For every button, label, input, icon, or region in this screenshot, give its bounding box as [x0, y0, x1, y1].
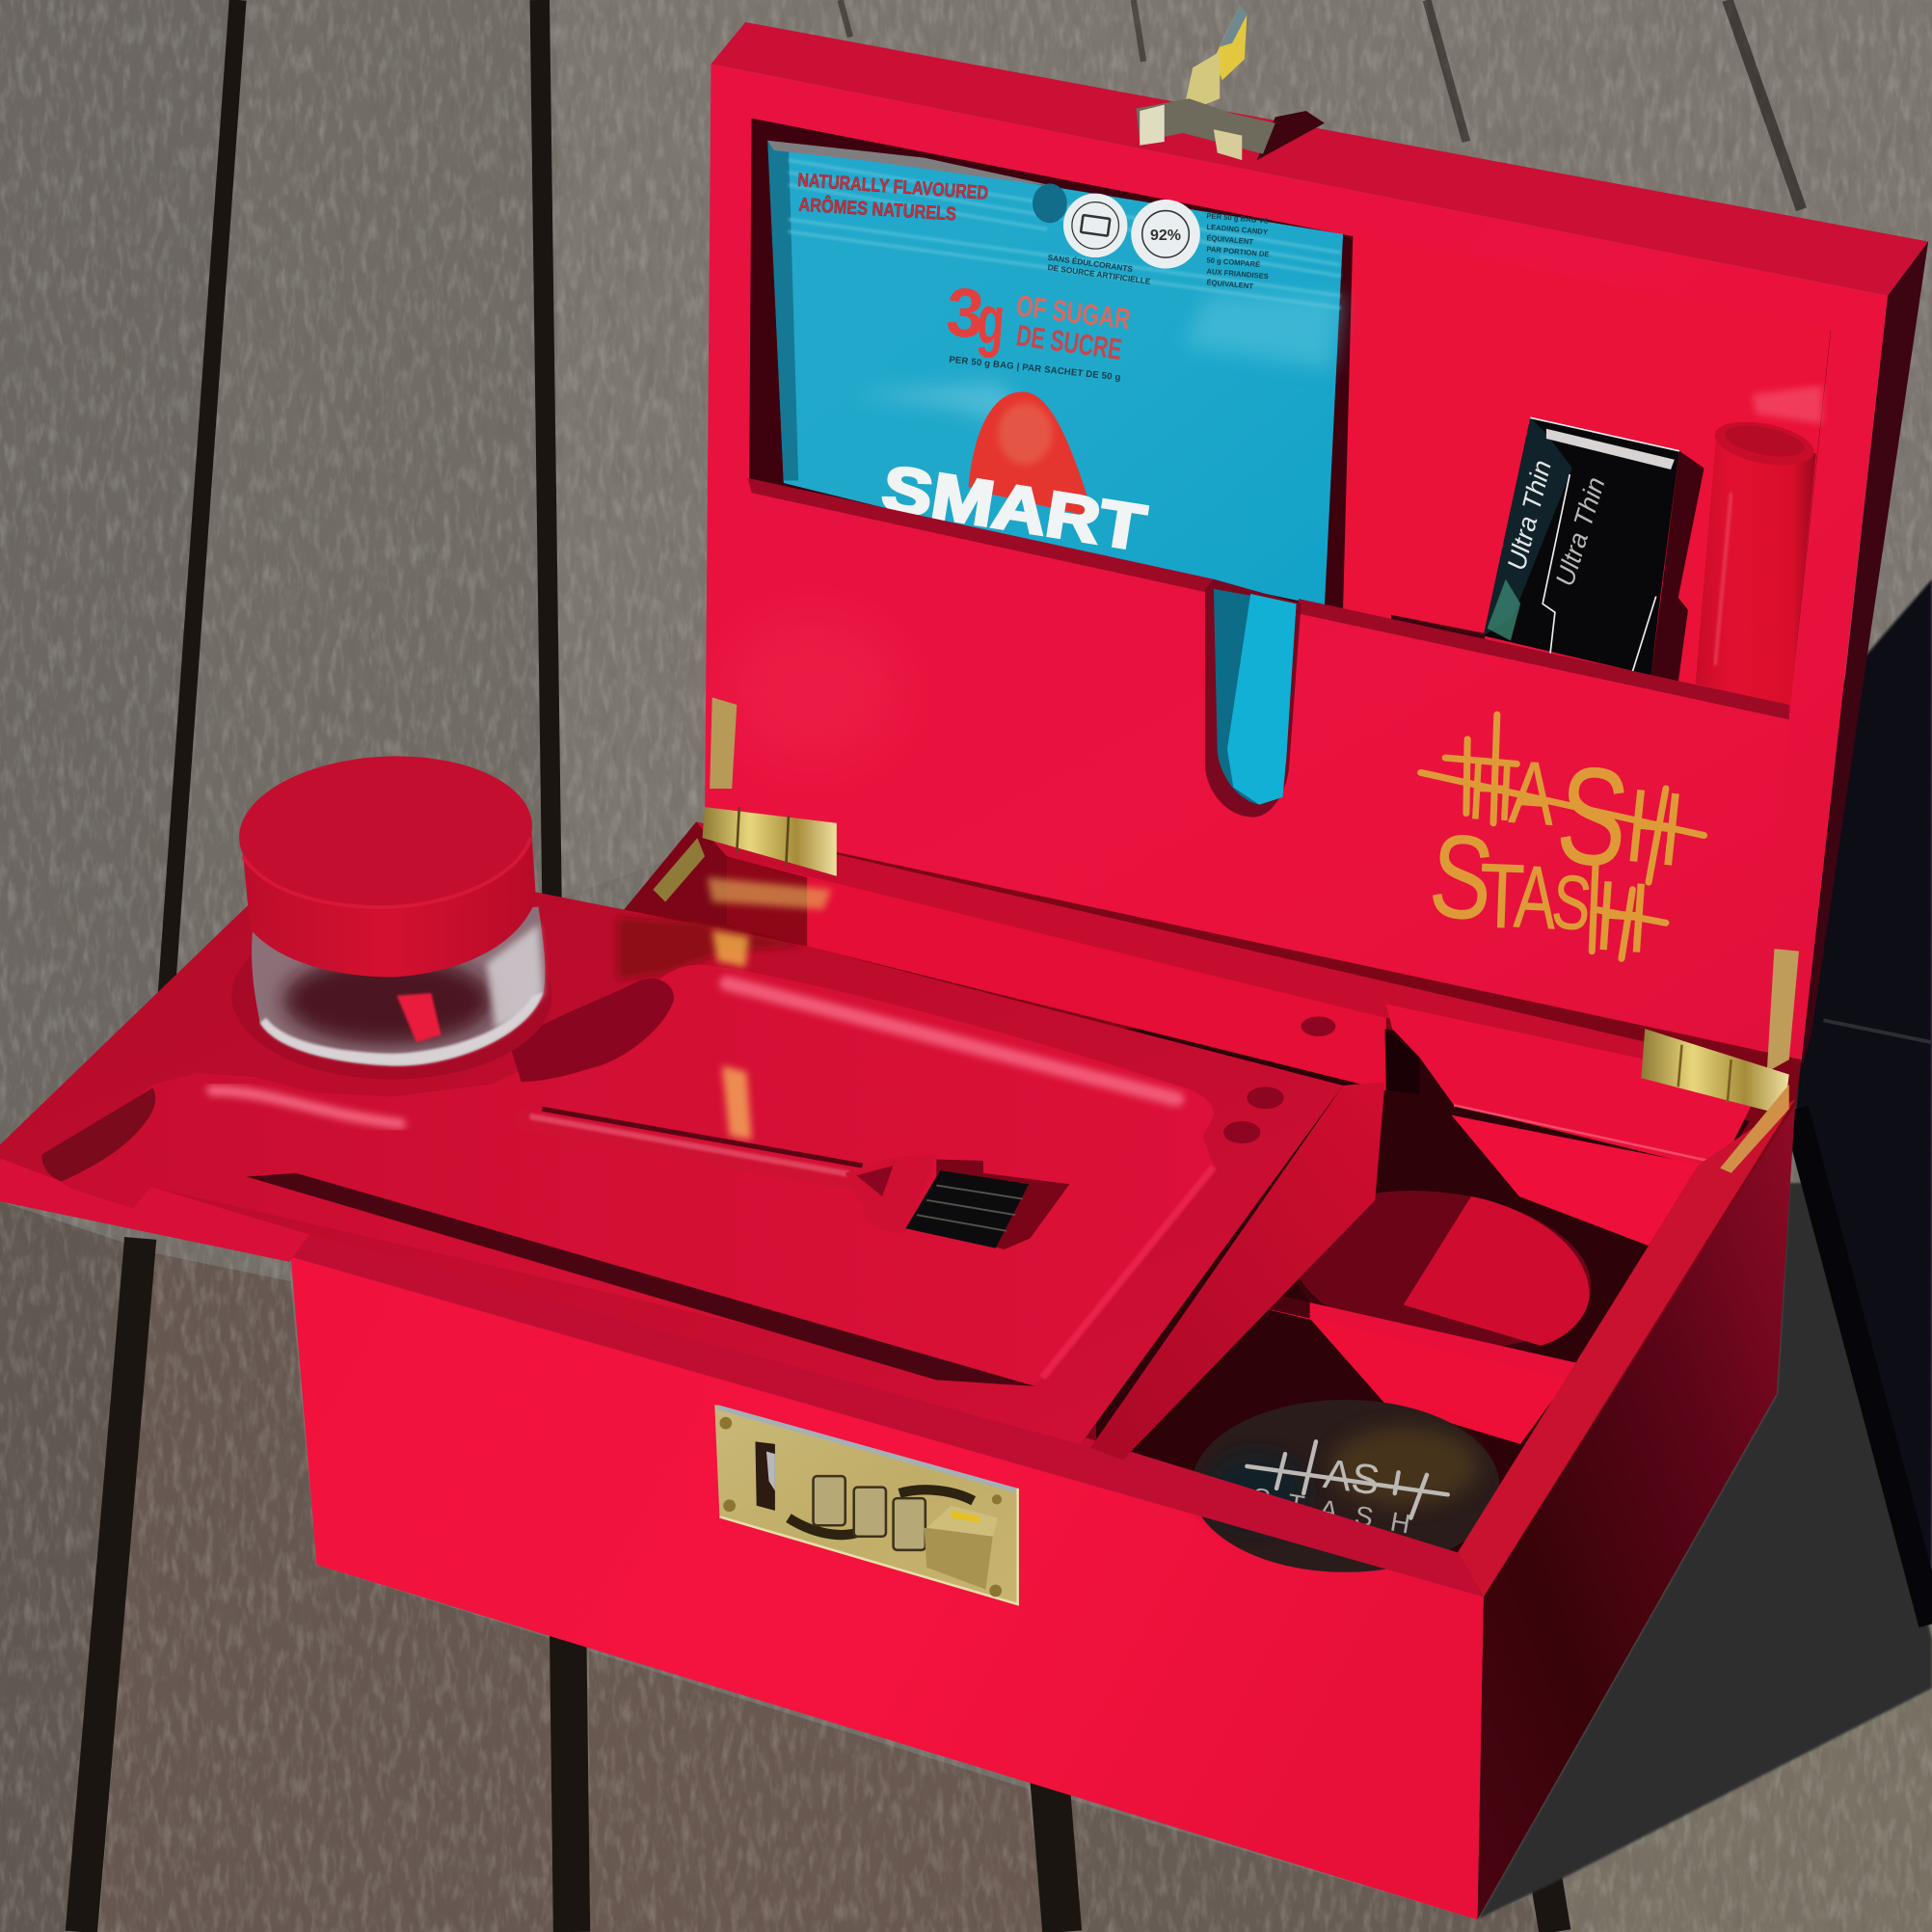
logo: Hash Stash gold: S: [1424, 809, 1499, 947]
notch with bag tab: [1205, 579, 1301, 818]
3g of sugar claim: g: [975, 281, 1007, 360]
brush bristles: [905, 1170, 1029, 1248]
tray front lip: [0, 1158, 309, 1262]
recess wall highlight: [727, 983, 1177, 1099]
lock dials: [814, 1476, 926, 1550]
logo: Hash Stash gold: H: [1622, 766, 1687, 888]
tray finger scoop: [41, 1088, 155, 1182]
tray holes: [1223, 1016, 1335, 1143]
base backing fill: [291, 821, 1802, 1597]
right outer side: [1477, 1105, 1795, 1919]
right rim: [1458, 1099, 1795, 1597]
gold reflection on ledge: [708, 877, 832, 909]
tray big scoop crescent: [509, 979, 674, 1082]
front face: [291, 1257, 1484, 1919]
jar lid: [241, 823, 536, 978]
seal caption: LEADING CANDY: [1206, 223, 1268, 236]
tray side wall in compartment: [1090, 1082, 1385, 1461]
paper silver edge: [1546, 429, 1675, 470]
lid inner face: [705, 64, 1888, 1069]
front rim: [291, 1235, 1484, 1597]
seal caption: ÉQUIVALENT: [1206, 278, 1254, 291]
compartment interior: [1090, 1029, 1750, 1568]
bag brand: SMART: [877, 453, 1150, 565]
seal caption: PAR PORTION DE: [1206, 245, 1270, 258]
rolling papers: Ultra Thin: [1550, 473, 1611, 589]
gold reflections: [712, 930, 749, 967]
free-from seal: [1063, 194, 1127, 257]
seal caption: AUX FRIANDISES: [1206, 267, 1269, 281]
tin red: [1281, 1172, 1601, 1378]
seal caption: [1047, 211, 1270, 291]
candy bag: [767, 141, 1343, 606]
jar well: [231, 912, 552, 1080]
rolling papers: [1484, 417, 1704, 683]
logo: Hash Stash gold: H: [1466, 739, 1516, 840]
tray dark shade near hinge: [617, 918, 807, 979]
tin logo text: AS: [1321, 1451, 1382, 1505]
92% seal: 92%: [1150, 228, 1181, 244]
right back wall: [1343, 234, 1831, 712]
92% seal: [1131, 200, 1200, 269]
soft light on lid: [727, 616, 899, 764]
seal caption: ÉQUIVALENT: [1206, 233, 1254, 246]
logo: Hash Stash gold: S: [1550, 736, 1635, 897]
box base: [291, 821, 1802, 1919]
divider: [1245, 1289, 1576, 1382]
logo: Hash Stash gold: T: [1478, 845, 1526, 949]
lock button: [925, 1528, 993, 1590]
lid recess dark: [749, 119, 1831, 714]
per bag line: PER 50 g BAG | PAR SACHET DE 50 g: [949, 355, 1121, 383]
tray long slot: [247, 1173, 1035, 1386]
3g of sugar claim: [944, 274, 1132, 366]
key slot: [755, 1441, 775, 1511]
seal caption: SANS ÉDULCORANTS: [1047, 253, 1134, 274]
lid right outer side: [1802, 241, 1928, 1069]
glass jar with red lid: [235, 749, 545, 1066]
logo: Hash Stash gold: S: [1548, 858, 1596, 947]
jar glass: [252, 907, 545, 1066]
top clasp: [1136, 5, 1325, 160]
logo: Hash Stash gold: H: [1593, 859, 1651, 974]
lock dial shadow: [789, 1518, 863, 1535]
tin black with silver logo: [1192, 1400, 1499, 1572]
combination lock: [714, 1405, 1018, 1604]
bag heading: NATURALLY FLAVOURED: [797, 170, 989, 204]
divider lit wall: [1310, 1319, 1568, 1444]
bag heading: ARÔMES NATURELS: [798, 193, 957, 226]
compartment back ledge: [1386, 1005, 1762, 1170]
lid front pocket panel: [705, 478, 1789, 1069]
channel ridge highlight: [212, 1090, 400, 1124]
open lid: [705, 22, 1928, 1069]
3g of sugar claim: 3: [944, 274, 986, 353]
bag heading: [797, 170, 989, 226]
left lid hinge: [653, 697, 837, 902]
bright wall patch top: [1452, 1115, 1699, 1246]
logo: Hash Stash gold: [1421, 714, 1704, 974]
tray recess: [54, 965, 1214, 1385]
cast shadow on the deck: [1477, 579, 1932, 1919]
gummy on bag: [969, 391, 1094, 518]
tray top: [0, 892, 1343, 1444]
tin black with silver logo: STASH: [1249, 1482, 1412, 1540]
wall faint decal: [1752, 386, 1822, 424]
brush shadow: [936, 1160, 1069, 1249]
lid rim top: [711, 22, 1928, 296]
red tube: [1696, 415, 1818, 706]
slide-out tray: [0, 892, 1343, 1444]
back ledge bright strip: [727, 856, 1386, 1090]
paper label text: Ultra Thin: [1502, 457, 1557, 573]
seal caption: PER 50 g BAG VS: [1206, 211, 1269, 226]
screws: [719, 1417, 1002, 1597]
3g of sugar claim: DE SUCRE: [1014, 319, 1124, 366]
3g of sugar claim: OF SUGAR: [1014, 289, 1132, 336]
seal caption: 50 g COMPARÉ: [1206, 255, 1261, 269]
logo: Hash Stash gold: A: [1507, 742, 1559, 845]
logo: Hash Stash gold: A: [1512, 846, 1559, 948]
right lid hinge: [1641, 949, 1799, 1173]
bag tear hole: [1033, 183, 1067, 223]
brush: [523, 1109, 1069, 1249]
seal caption: DE SOURCE ARTIFICIELLE: [1047, 262, 1151, 286]
slit under wall: [1391, 615, 1485, 643]
back ledge top strip: [696, 821, 1764, 1096]
